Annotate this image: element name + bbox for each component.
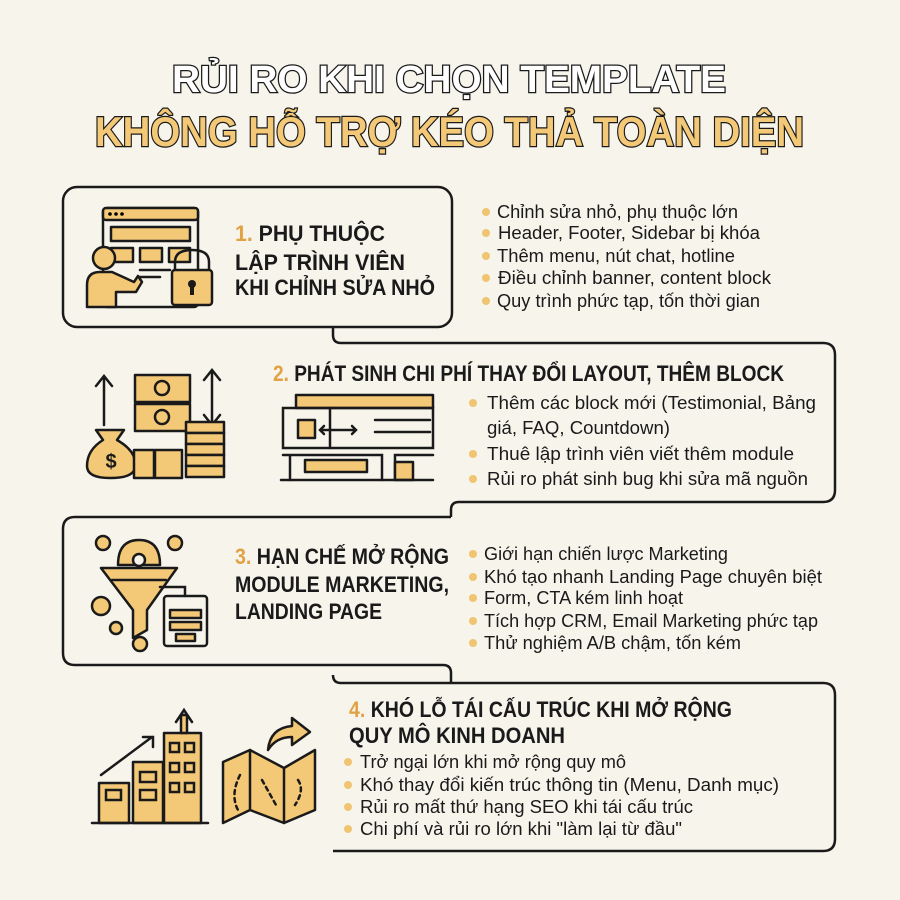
icon: money and arrows: $ [105,451,117,473]
bullets 2: giá, FAQ, Countdown) [487,418,670,438]
bullets 4: Rủi ro mất thứ hạng SEO khi tái cấu trúc [360,797,693,817]
panel 4 [92,696,779,839]
bullets 1 [482,202,772,311]
heading 1 [235,221,435,300]
icon: gear funnel [92,536,207,651]
bullets 3: Khó tạo nhanh Landing Page chuyên biệt [484,567,822,587]
icon: map with arrow [223,718,315,823]
panel outlines [63,187,835,851]
bullets 1: Header, Footer, Sidebar bị khóa [498,223,761,243]
panel 1 [87,208,435,307]
bullets 3: Thử nghiệm A/B chậm, tốn kém [484,633,741,653]
icon: money and arrows [87,370,224,478]
title: RỦI RO KHI CHỌN TEMPLATE [172,57,726,101]
bullets 1: Quy trình phức tạp, tốn thời gian [497,291,760,311]
bullets 1: Thêm menu, nút chat, hotline [497,246,735,266]
bullets 2: Thuê lập trình viên viết thêm module [487,444,794,464]
bullets 2: Thêm các block mới (Testimonial, Bảng [487,393,816,413]
bullets 4: Chi phí và rủi ro lớn khi "làm lại từ đầu" [360,819,682,839]
heading 1: KHI CHỈNH SỬA NHỎ [235,275,435,300]
heading 4: 4. KHÓ LỖ TÁI CẤU TRÚC KHI MỞ RỘNG [349,696,732,722]
heading 3: MODULE MARKETING, [235,572,449,597]
bullets 3: Tích hợp CRM, Email Marketing phức tạp [484,611,818,631]
bullets 3 [469,544,822,653]
heading 3: LANDING PAGE [235,599,382,624]
bullets 4: Khó thay đổi kiến trúc thông tin (Menu, Danh mục) [360,775,779,795]
heading 3 [235,544,449,624]
bullets 2 [469,393,816,489]
bullets 1: Chỉnh sửa nhỏ, phụ thuộc lớn [497,202,738,222]
icon: growing buildings [92,710,208,823]
bullets 4 [344,752,779,839]
icon: developer with locked browser [87,208,212,307]
heading 4 [349,696,732,748]
heading 1: LẬP TRÌNH VIÊN [235,250,405,275]
panel 2 [87,361,816,489]
bullets 3: Form, CTA kém linh hoạt [484,588,683,608]
bullets 1: Điều chỉnh banner, content block [498,268,772,288]
bullets 4: Trở ngại lớn khi mở rộng quy mô [360,752,626,772]
panel 3 [92,536,822,653]
icon: layout blocks [281,395,433,480]
heading 2: 2. PHÁT SINH CHI PHÍ THAY ĐỔI LAYOUT, THÊM BLOCK [273,361,784,386]
heading 3: 3. HẠN CHẾ MỞ RỘNG [235,544,449,569]
title [95,57,804,155]
heading 4: QUY MÔ KINH DOANH [349,723,565,748]
heading 1: 1. PHỤ THUỘC [235,221,385,246]
bullets 2: Rủi ro phát sinh bug khi sửa mã nguồn [487,469,808,489]
title: KHÔNG HỖ TRỢ KÉO THẢ TOÀN DIỆN [95,107,804,155]
bullets 3: Giới hạn chiến lược Marketing [484,544,728,564]
